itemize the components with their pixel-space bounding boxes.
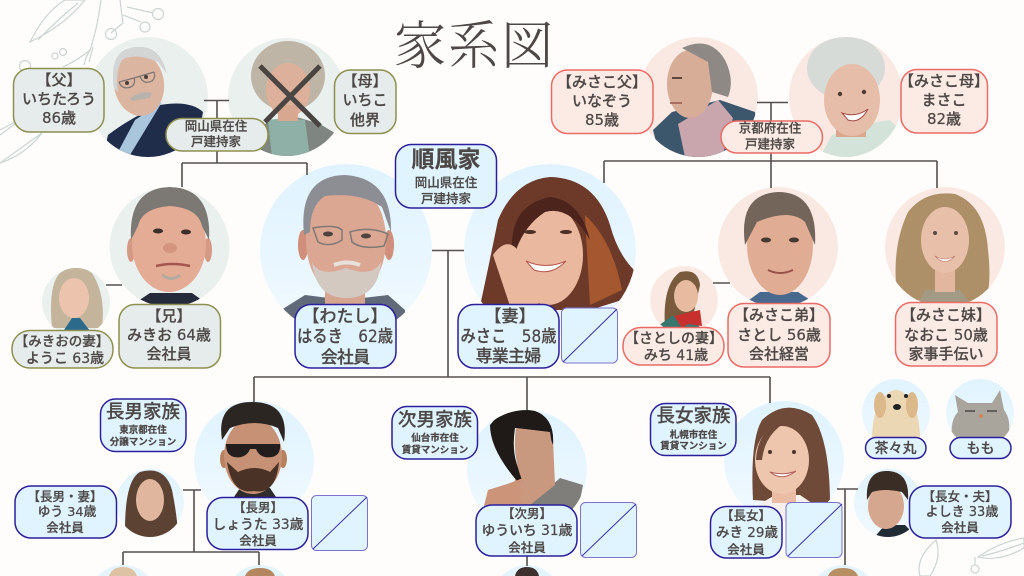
photo: watashi: [260, 164, 432, 320]
label: eldest son: 会社員: [239, 533, 277, 548]
photo: grandchild 2 (cropped): [235, 565, 285, 576]
label: eldest son family: 東京都在住: [119, 424, 167, 436]
label: second son family: 次男家族: [398, 410, 472, 431]
label: pet dog: [866, 438, 926, 458]
label: naoko: 家事手伝い: [908, 345, 984, 363]
label: misako parents home: 京都府在住: [739, 120, 802, 136]
label: pet cat: もも: [966, 441, 994, 457]
label: eldest son: [207, 498, 308, 550]
photo: naoko: [885, 187, 1005, 310]
label: eldest daughter family: 賃貸マンション: [660, 440, 727, 452]
label: wife: みさこ 58歳: [460, 327, 556, 347]
label: naoko: 【みさこ妹】: [901, 306, 991, 324]
label: misako father: 85歳: [585, 111, 619, 129]
photo: grandchild 4 (cropped): [818, 565, 868, 576]
label: father: いちたろう: [22, 90, 96, 108]
label: family name: [396, 144, 496, 208]
label: watashi: 【わたし】: [302, 307, 388, 327]
label: second son family: 賃貸マンション: [402, 444, 468, 456]
label: second son family: [392, 406, 478, 459]
label: watashi: [295, 304, 396, 368]
label: misako father: いなぞう: [572, 92, 632, 110]
label: second son: ゆういち 31歳: [482, 523, 573, 539]
label: eldest daughter husband: 会社員: [941, 520, 979, 535]
label: brother: 【兄】: [146, 307, 192, 325]
label: michi: [623, 328, 724, 365]
photo: dog: [862, 379, 930, 438]
label: misako father: [552, 70, 653, 134]
label: parents home: 戸建持家: [191, 134, 241, 149]
photo: mother with cross: [228, 38, 346, 157]
label: eldest son family: 長男家族: [106, 402, 180, 423]
label: naoko: なおこ 50歳: [904, 326, 988, 344]
label: satoshi: [728, 304, 830, 367]
label: brother: [119, 304, 220, 368]
label: eldest son wife: 会社員: [46, 520, 84, 535]
label: mother: 【母】: [342, 72, 388, 90]
label: wife: 【妻】: [484, 307, 536, 327]
label: parents home: 岡山県在住: [185, 118, 248, 134]
label: father: [14, 68, 104, 132]
label: eldest son wife: 【長男・妻】: [27, 489, 103, 504]
label: watashi: 会社員: [321, 348, 370, 368]
label: eldest son wife: [15, 486, 116, 538]
label: misako mother: まさこ: [921, 91, 967, 109]
label: eldest son family: 分譲マンション: [110, 436, 176, 448]
label: eldest son wife: ゆう 34歳: [38, 505, 97, 520]
photo: misako father: [638, 37, 758, 157]
family tree connector lines: [106, 100, 937, 566]
label: wife: [458, 304, 559, 368]
label: satoshi: 会社経営: [749, 345, 809, 363]
photo: mikio wife: [42, 268, 110, 336]
label: pet cat: [950, 438, 1011, 458]
label: eldest daughter family: 札幌市在住: [670, 429, 718, 441]
icon: empty photo placeholder (eldest daughter): [786, 502, 842, 558]
label: michi: みち 41歳: [644, 348, 708, 364]
photo: father: [88, 37, 208, 157]
photo: michi: [650, 266, 718, 327]
label: eldest daughter: 会社員: [727, 542, 765, 557]
label: father: 【父】: [36, 71, 82, 89]
photo: eldest son wife: [116, 469, 184, 538]
photo: eldest daughter: [724, 401, 844, 525]
label: brother: 会社員: [146, 345, 192, 363]
label: michi: 【さとしの妻】: [625, 331, 723, 347]
label: second son: [476, 505, 577, 556]
label: second son: 【次男】: [502, 506, 552, 521]
label: misako mother: 82歳: [927, 110, 961, 128]
label: eldest son: 【長男】: [233, 500, 283, 515]
label: satoshi: さとし 56歳: [737, 326, 821, 344]
label: second son: 会社員: [508, 540, 546, 555]
photo: misako mother: [789, 36, 905, 157]
label: watashi: はるき 62歳: [297, 327, 393, 347]
label: family name: 戸建持家: [421, 191, 471, 206]
photo: grandchild 1 (cropped): [98, 565, 148, 576]
photo: eldest son: [194, 401, 314, 502]
label: wife: 専業主婦: [476, 347, 541, 367]
label: misako mother: [899, 70, 989, 133]
label: eldest daughter: 【長女】: [721, 508, 771, 523]
label: family name: 岡山県在住: [415, 175, 478, 190]
label: eldest daughter family: [650, 404, 736, 456]
icon: empty photo placeholder (wife): [562, 308, 618, 363]
photo: cat: [946, 379, 1014, 438]
label: misako parents home: [721, 120, 822, 153]
label: satoshi: 【みさこ弟】: [734, 306, 824, 324]
label: father: 86歳: [42, 109, 76, 127]
photo: brother: [110, 187, 230, 310]
label: mikio wife: [12, 330, 113, 368]
label: eldest daughter husband: よしき 33歳: [926, 505, 998, 520]
label: mikio wife: 【みきおの妻】: [15, 334, 109, 350]
label: eldest daughter family: 長女家族: [656, 406, 731, 427]
label: misako mother: 【みさこ母】: [899, 72, 989, 90]
label: parents home: [166, 118, 268, 151]
title: 家系図: [394, 4, 555, 79]
label: naoko: [896, 302, 997, 366]
label: family name: 順風家: [412, 147, 480, 173]
label: mother: いちこ: [342, 91, 388, 109]
decorative leaves: top left: [0, 0, 164, 163]
label: mother: [334, 70, 396, 134]
label: eldest son family: [100, 399, 186, 452]
label: brother: みきお 64歳: [127, 326, 211, 344]
label: misako parents home: 戸建持家: [745, 136, 795, 152]
label: mother: 他界: [350, 111, 380, 129]
photo: grandchild 3 (cropped): [502, 565, 552, 576]
label: eldest daughter husband: [910, 486, 1011, 538]
label: pet dog: 茶々丸: [874, 440, 916, 457]
label: eldest daughter: みき 29歳: [716, 525, 778, 541]
label: eldest son: しょうた 33歳: [213, 517, 304, 533]
label: misako father: 【みさこ父】: [557, 73, 647, 91]
label: second son family: 仙台市在住: [411, 432, 459, 444]
label: mikio wife: ようこ 63歳: [26, 351, 104, 367]
decorative leaves: bottom right: [919, 538, 1024, 576]
label: eldest daughter husband: 【長女・夫】: [922, 489, 998, 504]
photo: eldest daughter husband: [854, 469, 922, 540]
photo: wife: [464, 164, 636, 336]
label: eldest daughter: [710, 506, 782, 558]
icon: empty photo placeholder (eldest son): [312, 496, 368, 550]
icon: empty photo placeholder (second son): [580, 502, 636, 558]
photo: satoshi: [718, 187, 838, 310]
photo: second son: [467, 410, 587, 509]
